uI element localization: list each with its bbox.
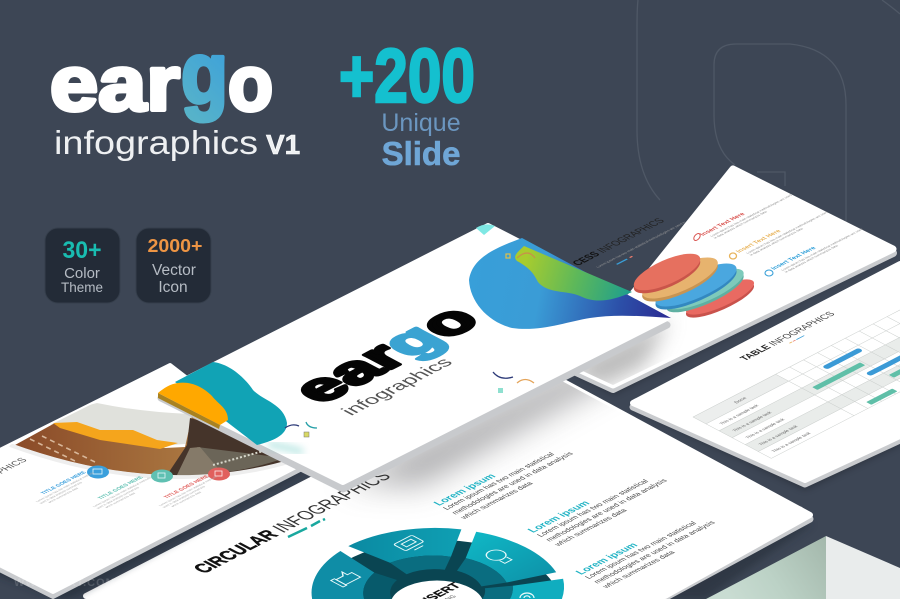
text block 2: [525, 468, 678, 548]
column: blue title: [29, 469, 102, 506]
table row labels: This is a sample task: [718, 403, 760, 425]
circular title: CIRCULAR INFOGRAPHICS: [189, 469, 396, 576]
circle icon: blue: [87, 466, 109, 478]
shadow from main slide: [352, 382, 604, 504]
table title: TABLE INFOGRAPHICS: [738, 310, 839, 362]
icon: monitor: [394, 535, 427, 553]
accent arcs right: [493, 372, 534, 393]
decorative outline shapes: [637, 0, 900, 240]
slide: main eargo cover: [158, 224, 671, 489]
column: red title: Lorem ipsum has two main statistical methods: [158, 475, 218, 507]
slide: photo with three titles: [0, 365, 305, 599]
icon: pin: [520, 593, 534, 598]
process label: blue: Insert Text Here: [770, 246, 818, 271]
stacked discs chart: [629, 246, 758, 324]
column: blue title: used in data analysis summarizes: [38, 481, 84, 505]
process label: red: Insert Text Here: [699, 212, 747, 237]
circle icon: teal: [151, 470, 173, 482]
column: red title: used in data analysis summarizes: [161, 485, 207, 509]
icon: yellow marker: [730, 253, 736, 259]
icon: red feather: [693, 232, 701, 242]
badge: 2000+ vector icon: 2000+: [148, 236, 202, 256]
column: blue title: TITLE GOES HERE: [40, 470, 88, 496]
column: red title: [152, 473, 225, 510]
process label: red: Lorem ipsum has two main statistical methodologies are used: [709, 194, 793, 237]
subtitle: infographics V1: infographics: [54, 124, 258, 161]
process label: yellow: Lorem ipsum has two main statistical methodologies are used: [745, 211, 829, 254]
badge: 30+ color theme: Color: [64, 265, 100, 282]
slide: process infographics: [565, 169, 893, 394]
shadow from main slide: [584, 320, 673, 385]
bottom right corner slide: [706, 536, 900, 599]
process label: red: in data analysis which summarizes data: [713, 210, 768, 239]
process label: blue: in data analysis which summarizes data: [784, 244, 839, 273]
column: blue title: which summarizes data: [47, 487, 80, 504]
accent arcs left: [285, 422, 317, 437]
green blob: [515, 246, 632, 301]
yellow mark and swoosh: [506, 253, 535, 258]
column: teal title: [86, 474, 159, 511]
cover logo: eargo: [276, 297, 494, 411]
process label: blue: Lorem ipsum has two main statistical methodologies are used: [780, 228, 864, 271]
text block 3: which summarizes data: [599, 549, 678, 590]
table dash accent: [789, 335, 805, 343]
text block 1: methodologies are used in data analysis: [449, 450, 575, 516]
circle icon: red: [208, 468, 230, 480]
soft teal swoosh: [268, 444, 303, 452]
text block 3: [573, 510, 726, 590]
badge: 30+ color theme: Theme: [61, 280, 103, 295]
subtitle: infographics V1: V1: [266, 129, 300, 160]
circular title dashes: [288, 519, 325, 537]
circular segmented chart: [312, 528, 564, 599]
process label: yellow: in data analysis which summarizes data: [749, 227, 804, 256]
text block 2: methodologies are used in data analysis: [543, 477, 669, 543]
badge: 30+ color theme: [45, 228, 120, 303]
text block 1: [431, 441, 584, 521]
slide: circular infographics: [83, 380, 814, 599]
orange blob: [158, 383, 228, 425]
logo: eargo: [50, 25, 273, 127]
text block 2: which summarizes data: [551, 507, 630, 548]
column: teal title: used in data analysis summarizes: [95, 486, 141, 510]
column: teal title: TITLE GOES HERE: [97, 475, 145, 501]
gantt table: [693, 273, 900, 458]
teal blob: [175, 362, 287, 445]
process label: yellow: Insert Text Here: [735, 229, 783, 254]
text block 2: Lorem ipsum has two main statistical: [535, 478, 651, 538]
badge: 2000+ vector icon: Icon: [158, 279, 188, 296]
badge: 30+ color theme: 30+: [62, 237, 102, 264]
text block 3: Lorem ipsum has two main statistical: [583, 520, 699, 580]
text block 1: Lorem ipsum: [432, 473, 499, 507]
table row labels: [718, 403, 813, 453]
process title: CESS INFOGRAPHICS: [570, 217, 668, 267]
unique slide caption: Slide: [382, 135, 460, 172]
cover subtitle: infographics: [336, 355, 457, 418]
slide: table infographics: [633, 264, 900, 489]
logo: eargo: g: [181, 25, 228, 122]
column: red title: TITLE GOES HERE: [163, 474, 211, 500]
logo: eargo: o: [228, 39, 273, 127]
column: blue title: Lorem ipsum has two main statistical methods: [35, 471, 95, 503]
text block 3: Lorem ipsum: [574, 542, 641, 576]
top corner accent: [476, 224, 495, 235]
table row labels: This is a sample task: [744, 417, 787, 439]
icon: light bulb: [482, 548, 515, 565]
badge: 2000+ vector icon: [136, 228, 211, 303]
column: teal title: Lorem ipsum has two main statistical methods: [92, 476, 152, 508]
logo: eargo: ear: [50, 39, 180, 127]
column: red title: which summarizes data: [170, 491, 203, 508]
+200 headline: +200: [339, 34, 475, 119]
text block 3: methodologies are used in data analysis: [591, 519, 717, 585]
icon: blue pin: [765, 270, 773, 276]
icon: thumbs up: [328, 570, 361, 587]
table row labels: This is a sample task: [757, 424, 800, 446]
unique slide caption: Unique: [381, 109, 461, 137]
watermark: WWW.XXXT.COM: [14, 577, 116, 589]
orange blob edge: [158, 393, 220, 429]
text block 1: Lorem ipsum has two main statistical: [441, 451, 557, 511]
process subtitle: Lorem ipsum has two main statistical methodologies are used in: [595, 221, 687, 268]
text block 1: which summarizes data: [457, 480, 536, 521]
photo area: [10, 403, 292, 478]
table header text: Done: [733, 396, 749, 405]
table row labels: This is a sample task: [731, 410, 774, 432]
column: teal title: which summarizes data: [104, 492, 137, 509]
text block 2: Lorem ipsum: [526, 500, 593, 534]
badge: 2000+ vector icon: Vector: [152, 262, 196, 279]
gantt bars: [797, 331, 900, 412]
unique slide caption: [381, 109, 461, 172]
blue blob: [469, 238, 671, 329]
table row labels: This is a sample task: [770, 431, 813, 453]
process dash accent: [616, 256, 633, 265]
